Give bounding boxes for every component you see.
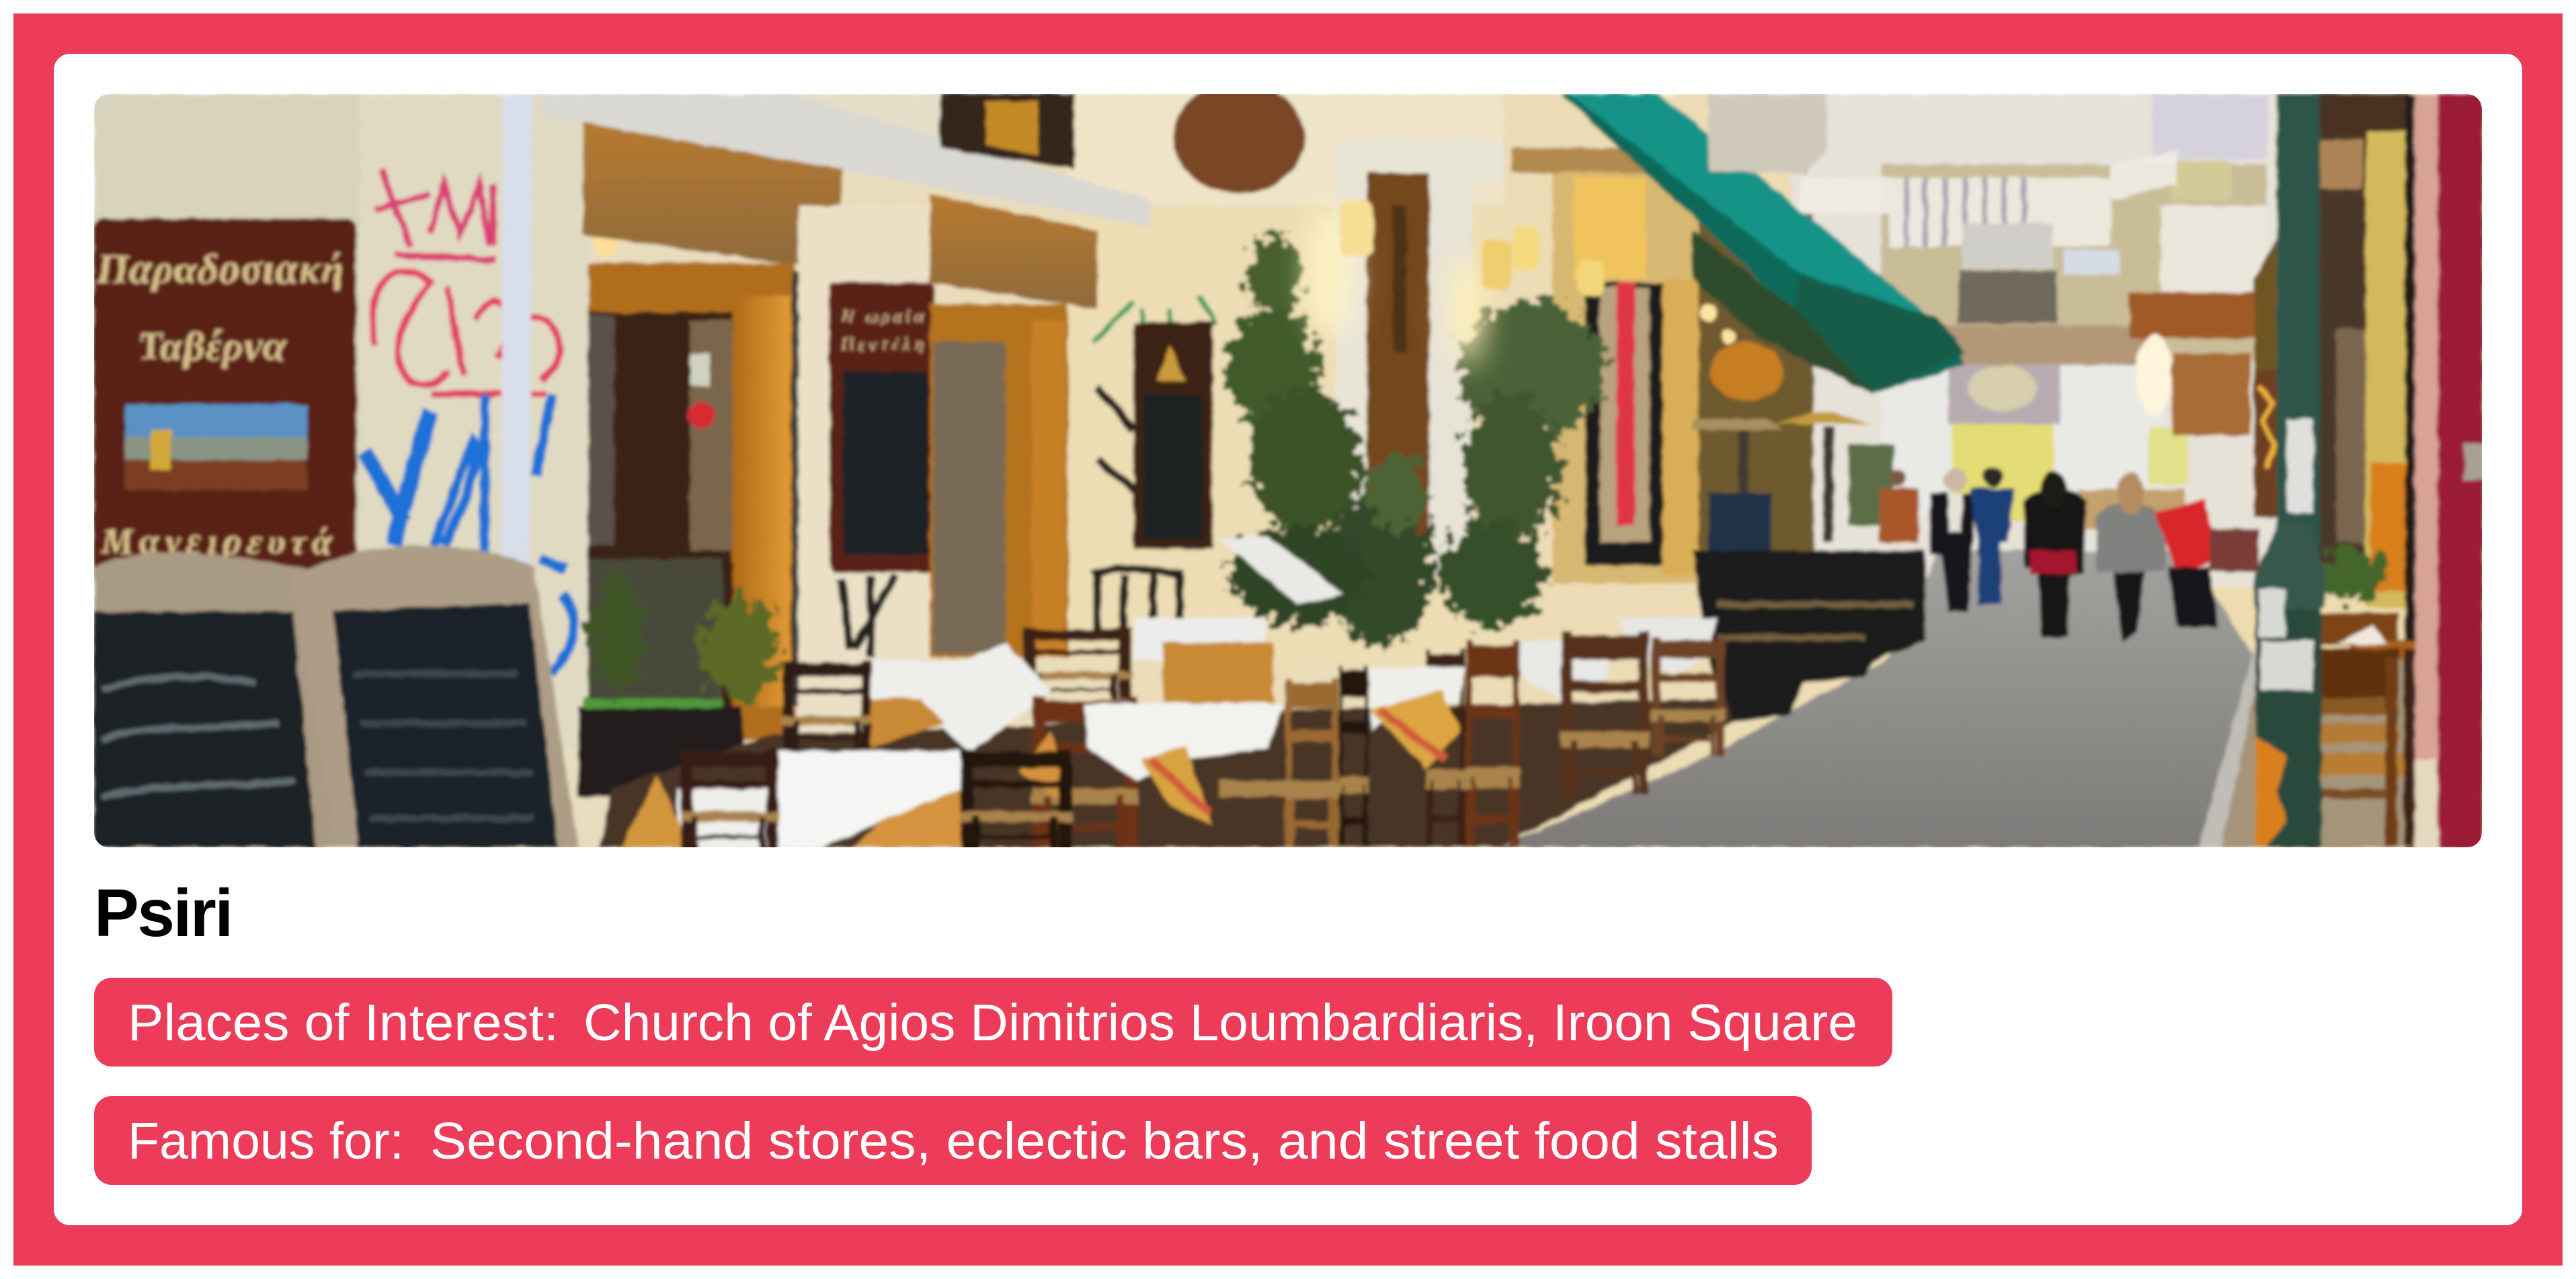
pill: places of interest — [94, 978, 1892, 1067]
chalkboard sign two — [830, 282, 935, 572]
front dark chairs — [680, 749, 1073, 851]
white cornice — [542, 93, 1150, 227]
photo background wall — [93, 93, 2492, 849]
wood lintel one — [583, 118, 841, 271]
teal awning — [1561, 93, 1965, 394]
chalkboard sign two: Η ωραία — [840, 306, 924, 326]
wood lintel two — [930, 194, 1098, 309]
planter by door — [578, 559, 778, 797]
pill: famous for — [94, 1096, 1812, 1185]
drain pipe — [501, 93, 532, 578]
red box and scooter — [2155, 500, 2259, 628]
pill: famous for: Famous for: — [128, 1112, 404, 1170]
dark under-table floor — [600, 699, 1733, 848]
chalkboard sign three — [1133, 322, 1213, 549]
white table cloth middle — [871, 643, 1051, 752]
green lamp pole — [2254, 93, 2325, 848]
arched window — [940, 93, 1074, 169]
dark seating area — [1692, 493, 1925, 723]
pill: places of interest: Church of Agios Dimitrios Loumbardiaris, Iroon Square — [583, 994, 1857, 1052]
menu stand — [1219, 536, 1344, 605]
table E cloth with checker — [1369, 667, 1465, 769]
second doorway — [930, 304, 1068, 657]
wooden chair and table right — [2313, 613, 2428, 847]
awning pole — [1511, 148, 1807, 173]
wall lamps — [1310, 200, 1735, 364]
first doorway — [588, 230, 799, 740]
taverna wall sign: Μαγειρευτά — [101, 522, 333, 562]
right arch wall — [1552, 173, 1814, 584]
round wooden sign — [1173, 82, 1304, 194]
potted plants — [2313, 549, 2386, 601]
taverna wall sign — [93, 219, 356, 572]
front wooden chairs — [1032, 641, 1520, 848]
blue graffiti — [365, 394, 574, 674]
yellow wall and orange panel — [2366, 95, 2415, 851]
upper right wall — [1068, 173, 1503, 666]
climbing plant — [1227, 237, 1433, 646]
chalkboard sign two: Πεντέλη — [840, 334, 923, 354]
wall top area — [772, 93, 940, 156]
green graffiti — [1092, 296, 1215, 342]
pedestrians — [1880, 467, 2185, 641]
pink graffiti — [372, 169, 559, 394]
blackboard menus — [93, 545, 578, 848]
black graffiti — [841, 386, 1183, 657]
pink wall and red door — [2415, 93, 2484, 849]
photo: Psiri street with taverna tables — [94, 94, 2482, 847]
left blank wall — [93, 93, 362, 570]
right side lights building — [2254, 93, 2410, 575]
palm plant — [1439, 301, 1603, 628]
heading: Psiri: Psiri — [94, 876, 232, 951]
taverna wall sign: Παραδοσιακή — [96, 247, 344, 292]
pill: places of interest: Places of Interest: — [128, 994, 559, 1052]
front table cloth — [621, 751, 961, 848]
third door with pilasters — [1336, 140, 1503, 575]
patio heaters and orange lantern — [1692, 342, 1894, 542]
table C cloth with checker — [1018, 703, 1285, 825]
background tables and chairs — [782, 618, 1725, 796]
upper building overhang — [1709, 93, 1827, 173]
taverna wall sign: Ταβέρνα — [138, 324, 286, 369]
wall between doors — [799, 205, 930, 748]
sidewalk right — [2202, 649, 2448, 848]
distant sky and buildings — [1791, 93, 2284, 586]
pill: famous for: Second-hand stores, eclectic bars, and street food stalls — [430, 1112, 1779, 1170]
street pavement — [1498, 551, 2254, 848]
